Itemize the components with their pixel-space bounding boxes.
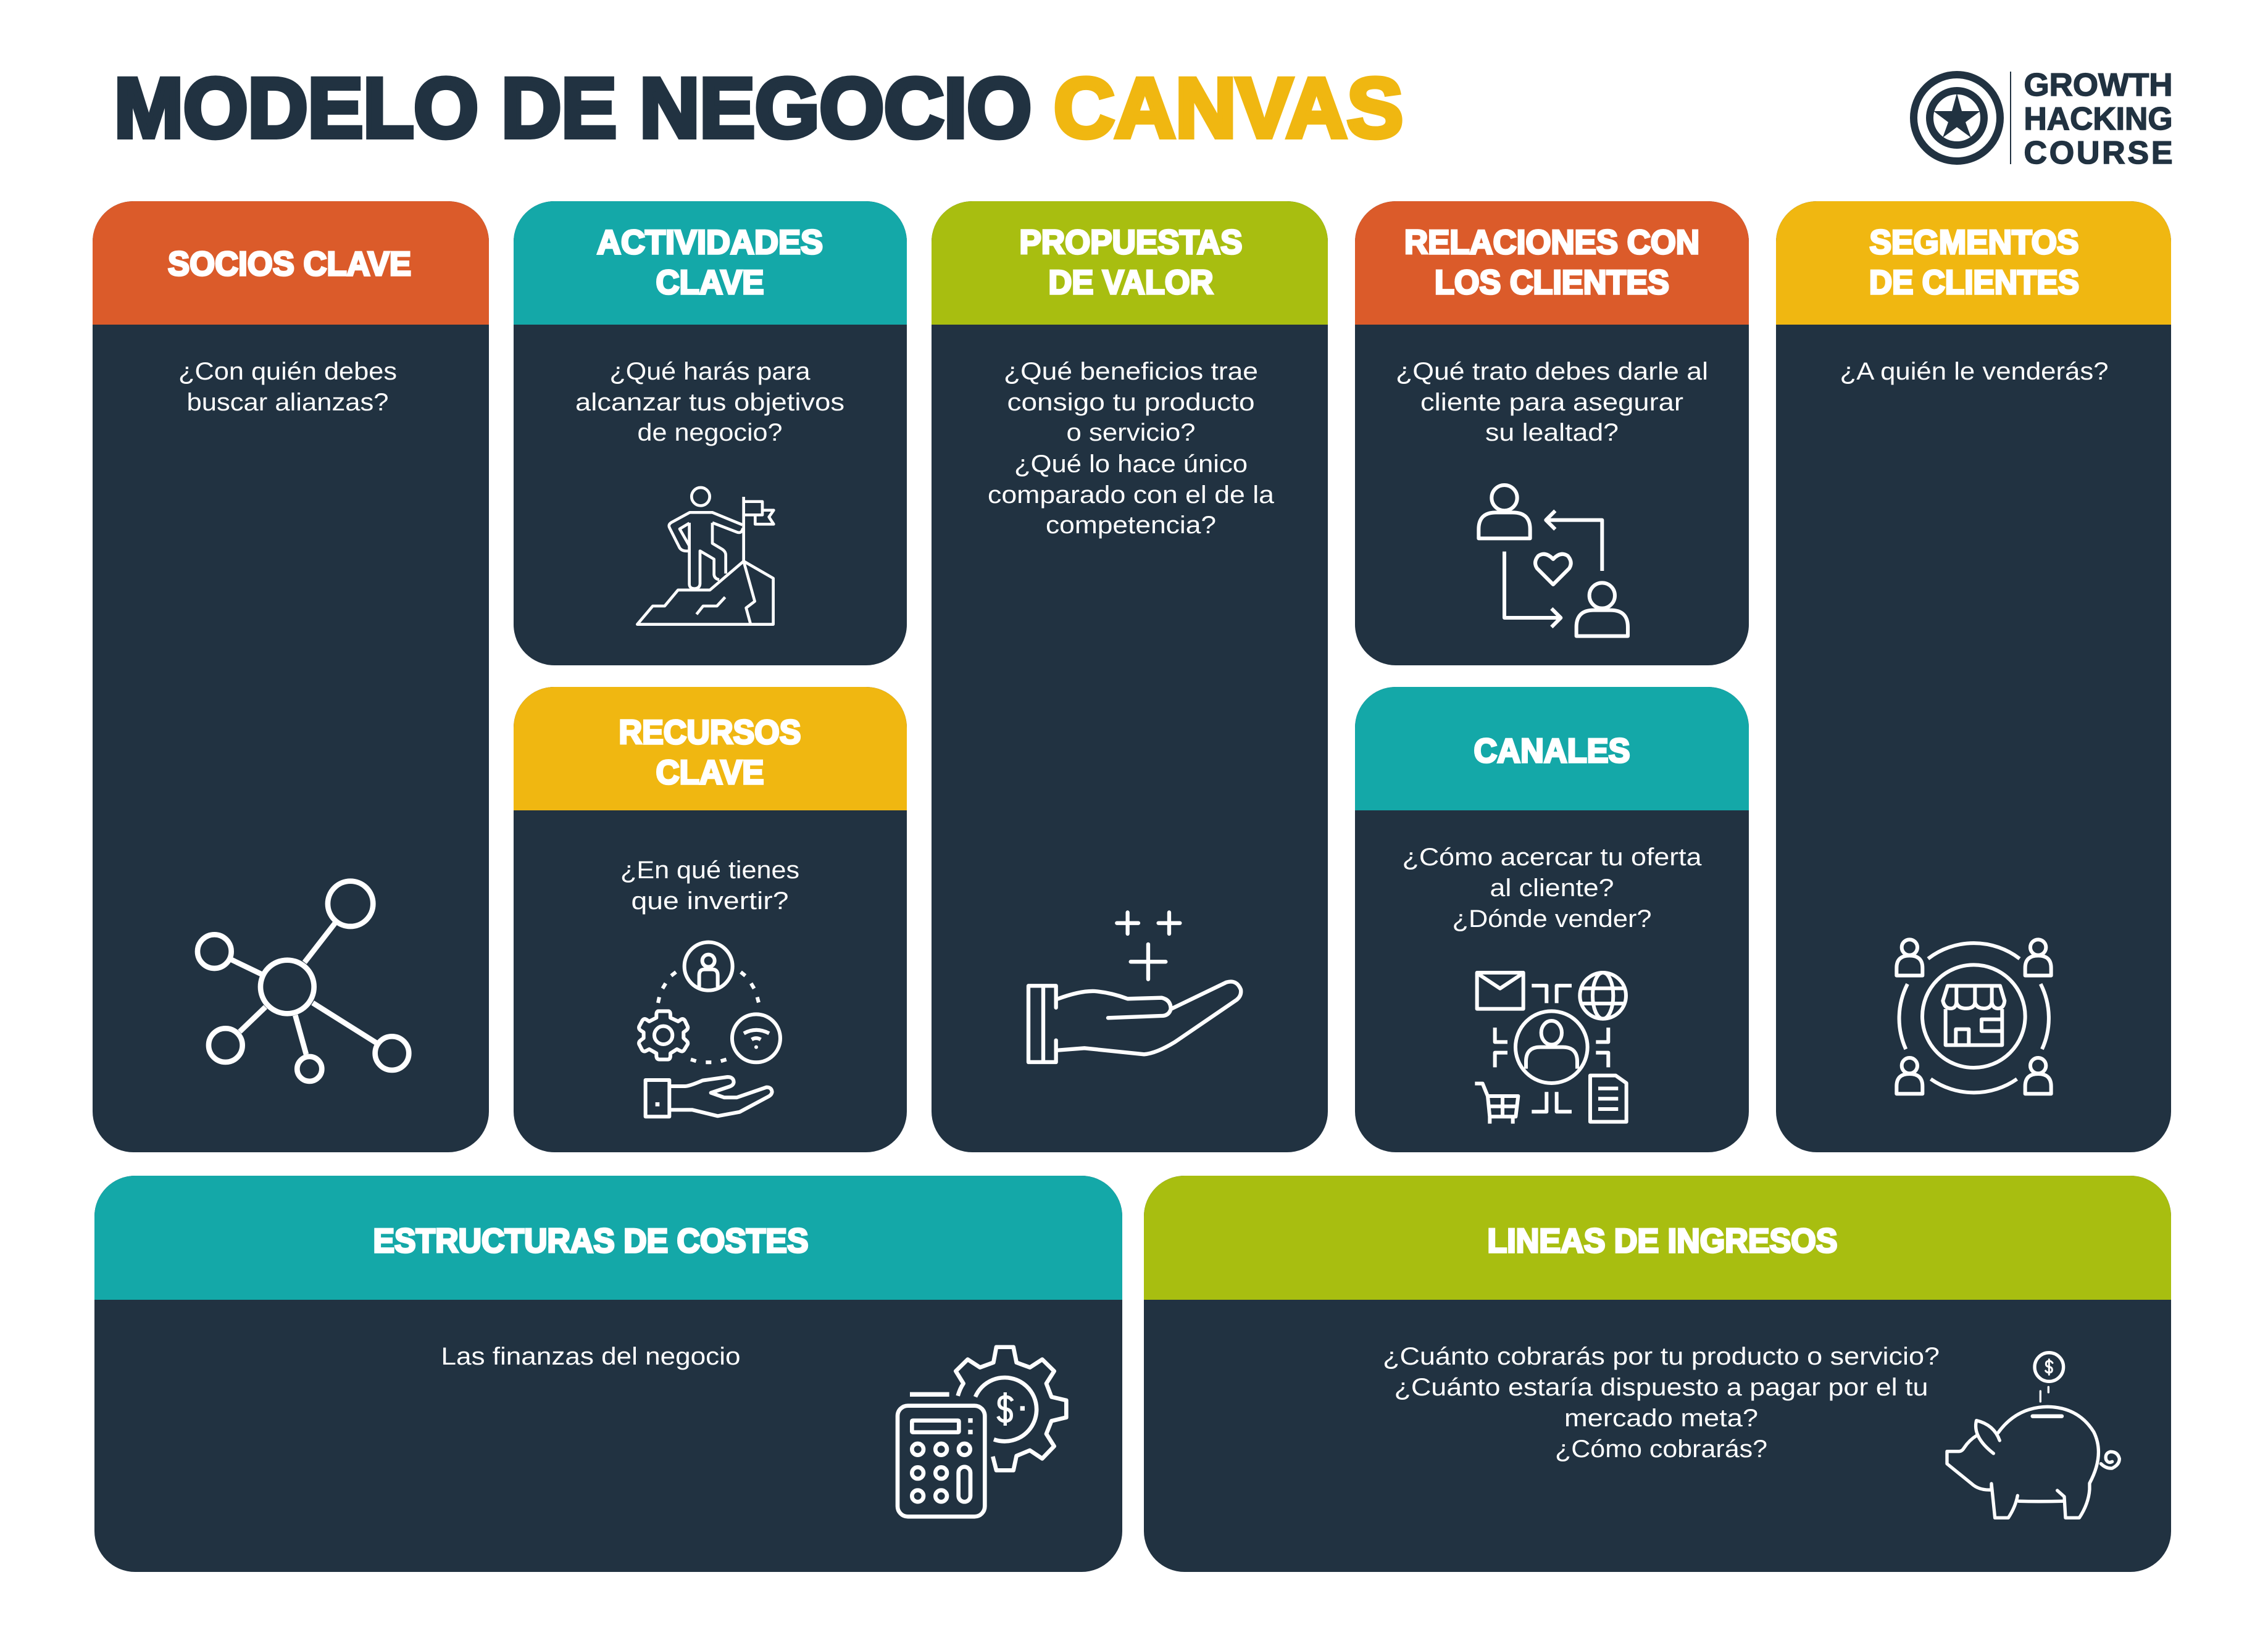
panel: propuestas de valor: comparado con el de la xyxy=(988,481,1275,509)
panel: lineas de ingresos: ¿Cuánto estaría dispuesto a pagar por el tu xyxy=(1394,1374,1928,1401)
panel: lineas de ingresos: ¿Cuánto cobrarás por tu producto o servicio? xyxy=(1383,1343,1940,1370)
panel: actividades clave: ACTIVIDADES xyxy=(597,223,823,261)
panel: recursos clave xyxy=(514,687,907,1152)
panel: socios clave: ¿Con quién debes xyxy=(178,358,397,385)
panel: relaciones con los clientes: su lealtad? xyxy=(1485,419,1619,446)
panel: segmentos de clientes: SEGMENTOS xyxy=(1869,223,2079,261)
panel: propuestas de valor xyxy=(932,201,1328,1152)
panel: recursos clave: CLAVE xyxy=(656,753,764,791)
panel: relaciones con los clientes: cliente para asegurar xyxy=(1420,389,1683,416)
icon: customer relationship loop xyxy=(1478,485,1628,636)
panel: lineas de ingresos: ¿Cómo cobrarás? xyxy=(1555,1436,1767,1463)
panel: propuestas de valor: o servicio? xyxy=(1067,419,1195,446)
panel: segmentos de clientes xyxy=(1776,201,2171,1152)
panel: propuestas de valor: ¿Qué lo hace único xyxy=(1014,451,1248,478)
panel: canales: CANALES xyxy=(1474,731,1630,770)
panel: lineas de ingresos: LINEAS DE INGRESOS xyxy=(1488,1221,1837,1260)
panel: propuestas de valor: PROPUESTAS xyxy=(1020,223,1242,261)
panel: estructuras de costes: Las finanzas del negocio xyxy=(441,1343,741,1370)
logo: Growth Hacking Course: GROWTH xyxy=(2024,67,2173,103)
panel: actividades clave: alcanzar tus objetivos xyxy=(575,389,844,416)
panel: segmentos de clientes: DE CLIENTES xyxy=(1869,263,2079,301)
panel: recursos clave: RECURSOS xyxy=(619,713,801,751)
icon: calculator and gear xyxy=(898,1347,1066,1516)
panel: propuestas de valor: competencia? xyxy=(1046,512,1216,539)
icon: climber with flag xyxy=(637,488,773,625)
title: CANVAS xyxy=(1054,61,1403,156)
panel: actividades clave: ¿Qué harás para xyxy=(610,358,811,385)
panel: propuestas de valor: DE VALOR xyxy=(1048,263,1214,301)
panel: actividades clave: CLAVE xyxy=(656,263,764,301)
panel: lineas de ingresos xyxy=(1144,1176,2171,1572)
panel: relaciones con los clientes xyxy=(1355,201,1749,665)
panel: estructuras de costes xyxy=(94,1176,1122,1572)
panel: actividades clave xyxy=(514,201,907,665)
panel: socios clave: SOCIOS CLAVE xyxy=(168,244,411,283)
logo: Growth Hacking Course xyxy=(1914,67,2173,171)
panel: socios clave: buscar alianzas? xyxy=(186,389,389,416)
panel: relaciones con los clientes: ¿Qué trato debes darle al xyxy=(1396,358,1708,385)
panel: estructuras de costes: ESTRUCTURAS DE COSTES xyxy=(373,1221,809,1260)
icon: resources in hand xyxy=(639,942,780,1116)
panel: canales: ¿Dónde vender? xyxy=(1452,905,1652,933)
panel: recursos clave: ¿En qué tienes xyxy=(620,857,799,884)
panel: relaciones con los clientes: LOS CLIENTES xyxy=(1435,263,1669,301)
icon: shop with customers xyxy=(1896,939,2051,1094)
title: MODELO DE NEGOCIO xyxy=(114,61,1032,156)
panel: relaciones con los clientes: RELACIONES CON xyxy=(1404,223,1699,261)
panel: canales: ¿Cómo acercar tu oferta xyxy=(1403,844,1702,871)
logo: Growth Hacking Course: HACKING xyxy=(2024,101,2173,137)
logo: Growth Hacking Course: COURSE xyxy=(2024,135,2173,171)
panel: lineas de ingresos: mercado meta? xyxy=(1564,1405,1758,1432)
panel: canales xyxy=(1355,687,1749,1152)
panel: actividades clave: de negocio? xyxy=(637,419,783,446)
panel: recursos clave: que invertir? xyxy=(631,887,789,915)
panel: propuestas de valor: consigo tu producto xyxy=(1007,389,1254,416)
icon: network xyxy=(198,881,409,1081)
panel: segmentos de clientes: ¿A quién le venderás? xyxy=(1840,358,2109,385)
panel: canales: al cliente? xyxy=(1490,875,1614,902)
panel: propuestas de valor: ¿Qué beneficios trae xyxy=(1004,358,1258,385)
icon: piggy bank with coin xyxy=(1947,1353,2119,1518)
panel: socios clave xyxy=(93,201,489,1152)
icon: sales channels xyxy=(1475,973,1627,1124)
icon: open hand with plus signs xyxy=(1028,912,1241,1062)
